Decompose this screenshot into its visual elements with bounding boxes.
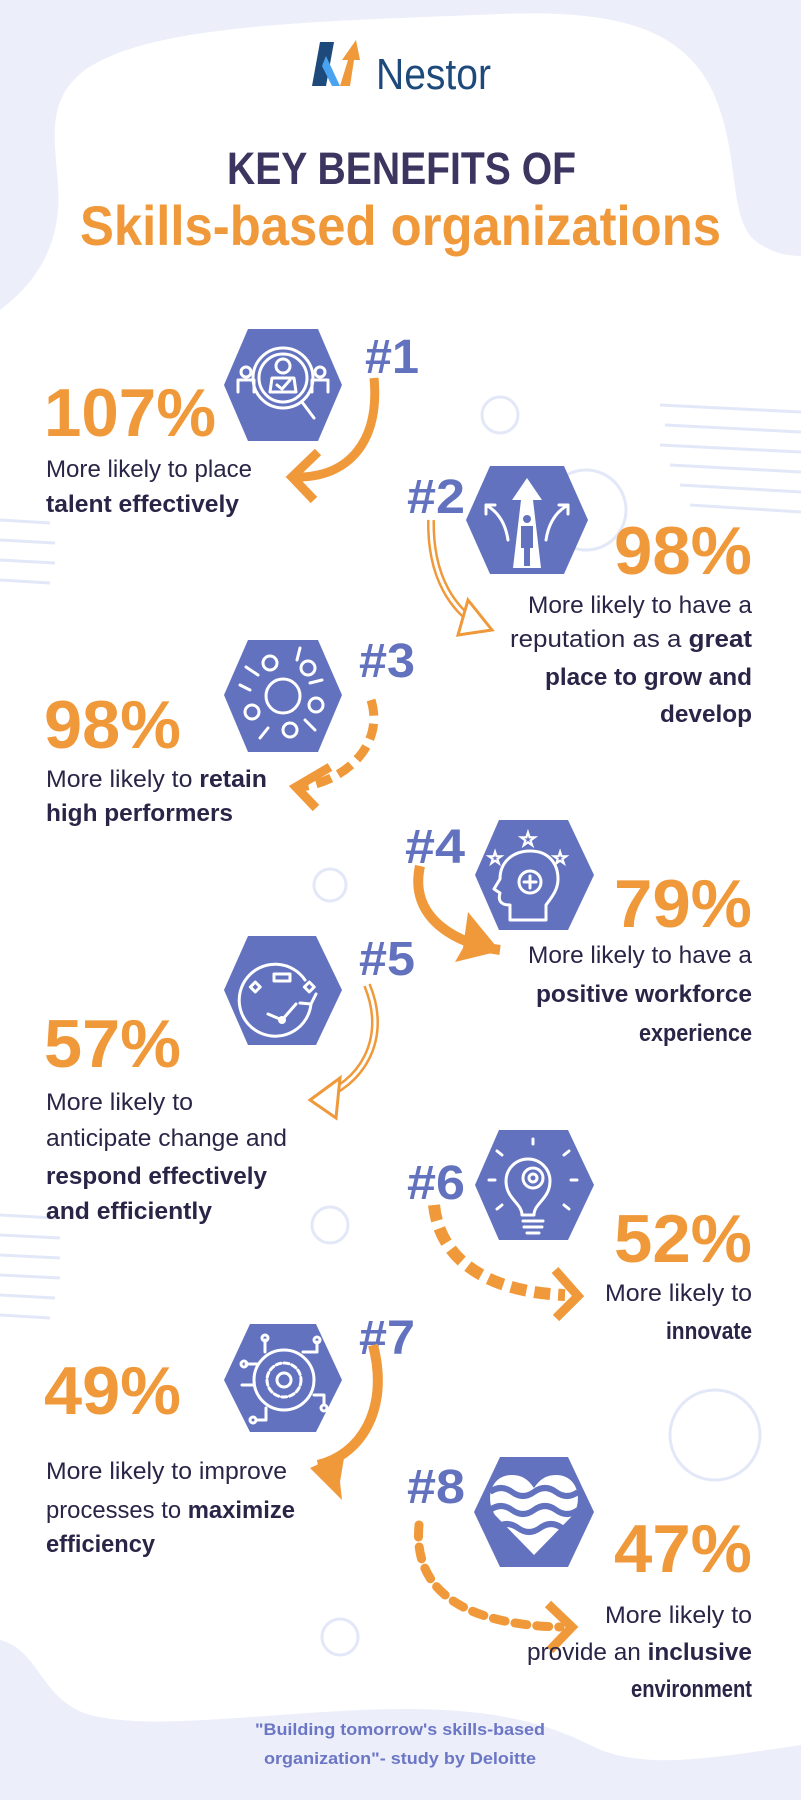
benefit 1: talent effectively	[46, 491, 240, 518]
benefit 6: innovate	[666, 1318, 752, 1345]
arrow 8	[419, 1525, 572, 1650]
benefit 5: respond effectively	[46, 1163, 268, 1190]
arrow 6	[434, 1205, 578, 1318]
citation: organization"- study by Deloitte	[264, 1749, 536, 1768]
benefit 8	[407, 1457, 752, 1703]
benefit 2	[407, 466, 753, 728]
benefit 4: More likely to have a	[528, 942, 753, 969]
benefit 1: #1	[365, 331, 419, 384]
benefit 8: 47%	[614, 1511, 752, 1587]
title: Skills-based organizations	[80, 194, 721, 257]
arrow 2	[431, 520, 492, 635]
benefit 4: positive workforce	[536, 981, 752, 1008]
citation: "Building tomorrow's skills-based	[255, 1720, 545, 1739]
icon: hexagon head stars: ☆	[519, 827, 537, 851]
benefit 6: More likely to	[605, 1280, 752, 1307]
icon: hexagon lightbulb gear	[475, 1130, 594, 1240]
benefit 3: 98%	[44, 687, 181, 763]
benefit 1: More likely to place	[46, 456, 252, 483]
icon: hexagon gear circuit	[224, 1324, 342, 1432]
benefit 1: 107%	[44, 375, 216, 451]
benefit 5: 57%	[44, 1006, 181, 1082]
icon: hexagon heart waves	[474, 1457, 594, 1567]
benefit 5: More likely to	[46, 1089, 193, 1116]
icon: hexagon search person	[224, 329, 342, 441]
arrow 4	[418, 866, 500, 962]
benefit 4	[405, 820, 753, 1047]
benefit 4: experience	[639, 1020, 752, 1047]
benefit 5	[44, 933, 415, 1225]
benefit 2: More likely to have a	[528, 592, 753, 619]
benefit 8: environment	[631, 1676, 752, 1703]
benefit 6: 52%	[614, 1201, 752, 1277]
benefit 5: #5	[359, 933, 415, 986]
benefit 2: reputation as a great	[510, 626, 752, 653]
benefit 7	[44, 1312, 415, 1558]
icon: hexagon team circle	[224, 640, 342, 752]
icon: hexagon arrows	[466, 466, 588, 574]
logo	[312, 40, 491, 99]
logo: Nestor	[376, 50, 491, 99]
icon: hexagon head stars: ☆	[552, 848, 568, 869]
benefit 3: high performers	[46, 800, 233, 827]
benefit 7: More likely to improve	[46, 1458, 287, 1485]
benefit 2: develop	[660, 701, 752, 728]
benefit 3: #3	[359, 635, 415, 688]
benefit 6: #6	[407, 1157, 465, 1210]
icon: hexagon head stars	[475, 820, 594, 930]
citation	[255, 1720, 545, 1768]
benefit 2: 98%	[614, 513, 752, 589]
arrow 3	[296, 700, 374, 808]
icon: hexagon head stars: ☆	[487, 848, 503, 869]
benefit 5: and efficiently	[46, 1198, 213, 1225]
benefit 7: #7	[359, 1312, 415, 1365]
benefit 2: place to grow and	[545, 664, 752, 691]
title	[80, 143, 721, 257]
benefit 4: 79%	[614, 866, 752, 942]
benefit 6	[407, 1130, 752, 1345]
benefit 5: anticipate change and	[46, 1125, 287, 1152]
benefit 2: #2	[407, 471, 465, 524]
arrow 7	[310, 1345, 378, 1500]
benefit 1	[44, 329, 419, 518]
benefit 8: #8	[407, 1461, 465, 1514]
arrow 1	[292, 378, 375, 500]
arrow 5	[310, 985, 375, 1118]
benefit 7: efficiency	[46, 1531, 156, 1558]
benefit 7: 49%	[44, 1353, 181, 1429]
benefit 3	[44, 635, 415, 827]
icon: hexagon stopwatch	[224, 936, 342, 1045]
benefit 8: provide an inclusive	[527, 1639, 752, 1666]
benefit 4: #4	[405, 821, 465, 874]
title: KEY BENEFITS OF	[227, 143, 576, 194]
benefit 7: processes to maximize	[46, 1497, 295, 1524]
benefit 3: More likely to retain	[46, 766, 267, 793]
benefit 8: More likely to	[605, 1602, 752, 1629]
